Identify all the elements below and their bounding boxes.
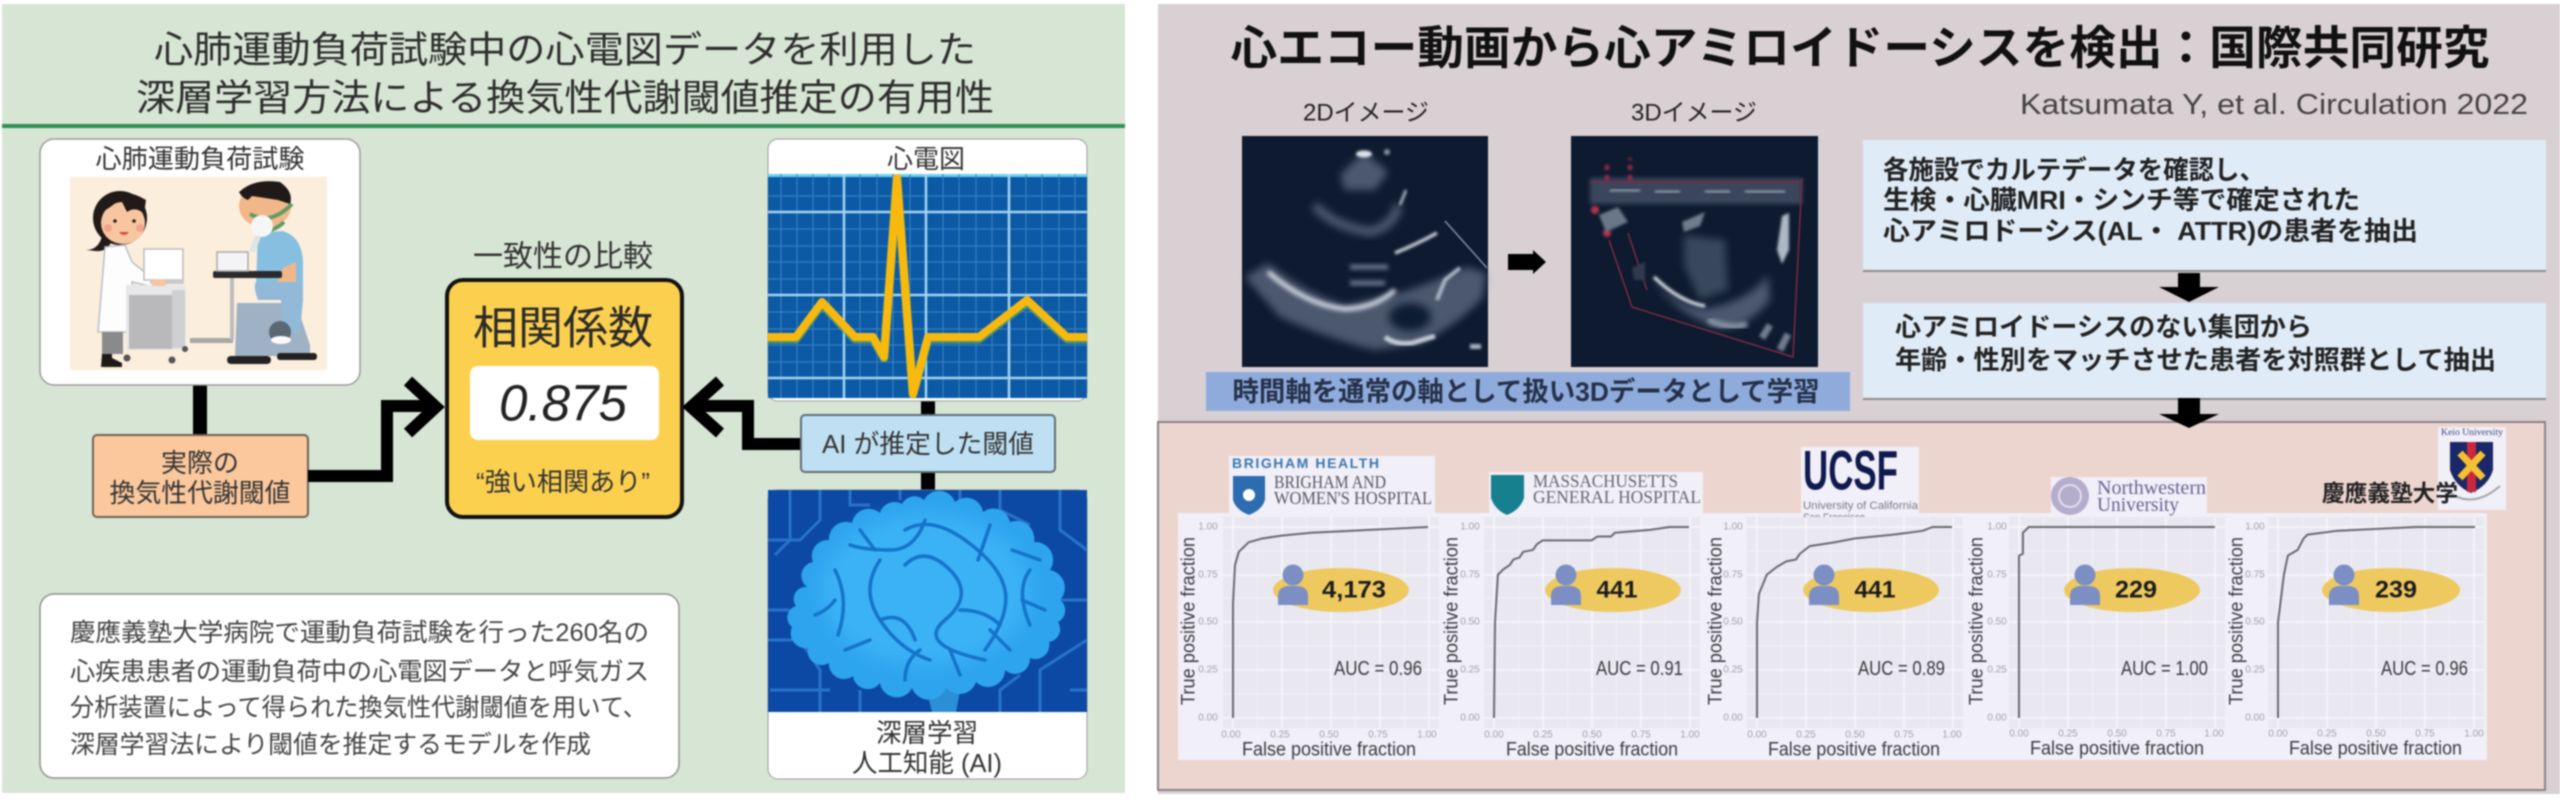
arrow: AI threshold to correlation: [691, 381, 802, 444]
box: control extraction: [1863, 303, 2546, 400]
chart: UCSF ROC AUC 0.89: 0.25: [1723, 664, 1743, 676]
chart: MGH ROC AUC 0.91: 0.75: [1631, 730, 1651, 740]
box: control extraction: 心アミロイドーシスのない集団から: [1895, 312, 2312, 342]
heading: correlation coefficient: 相関係数: [473, 302, 653, 354]
chart: Brigham ROC AUC 0.96: 0.00: [1221, 730, 1241, 740]
text block: study method: 分析装置によって得られた換気性代謝閾値を用いて、: [70, 694, 647, 722]
chart: Northwestern ROC AUC 1.00: 0.75: [2156, 728, 2176, 740]
label: comparison of agreement: 一致性の比較: [473, 240, 653, 274]
chart: UCSF ROC AUC 0.89: [1706, 517, 1963, 760]
chart: Brigham ROC AUC 0.96: 4,173: [1322, 576, 1386, 604]
box: case extraction: 心アミロドーシス(AL・ ATTR)の患者を抽出: [1883, 216, 2418, 246]
box: actual ventilatory threshold: 実際の: [161, 448, 239, 478]
panel: multicentre ROC results: [1158, 422, 2545, 790]
text block: study method: 深層学習法により閾値を推定するモデルを作成: [70, 731, 591, 759]
chart: Brigham ROC AUC 0.96: True positive fraction: [1178, 537, 1200, 705]
chart: MGH ROC AUC 0.91: 1.00: [1680, 730, 1700, 740]
image: 3D echocardiogram volume: [1571, 136, 1818, 367]
label: test name: 心肺運動負荷試験: [96, 144, 304, 174]
logo: Northwestern University: University: [2097, 494, 2179, 516]
chart: MGH ROC AUC 0.91: 0.00: [1484, 730, 1504, 740]
text block: study method: 心疾患患者の運動負荷中の心電図データと呼気ガス: [70, 658, 649, 686]
chart: UCSF ROC AUC 0.89: 0.75: [1894, 730, 1914, 740]
chart: Northwestern ROC AUC 1.00: 0.75: [1987, 570, 2007, 580]
illustration: doctor and patient on ergometer: [70, 177, 327, 370]
value: correlation: 0.875: [499, 374, 628, 432]
chart: Keio ROC AUC 0.96: 0.75: [2245, 570, 2265, 580]
logo: Brigham and Women's Hospital: WOMEN'S HOSPITAL: [1274, 488, 1432, 508]
card: deep learning AI: [768, 490, 1087, 779]
title: detection of cardiac amyloidosis: 心エコー動画から心アミロイドーシスを検出：国際共同研究: [1230, 22, 2490, 74]
chart: Brigham ROC AUC 0.96: 0.25: [1198, 664, 1218, 676]
caption: deep learning, artificial intelligence: [852, 718, 1002, 778]
chart: Northwestern ROC AUC 1.00: 1.00: [2204, 728, 2224, 740]
ultrasound cart and laptop: [124, 249, 188, 364]
box: actual ventilatory threshold: 換気性代謝閾値: [110, 478, 290, 508]
illustration: brain on circuit background: [768, 490, 1087, 712]
text block: study method: 慶應義塾大学病院で運動負荷試験を行った260名の: [70, 619, 649, 647]
chart: MGH ROC AUC 0.91: 0.00: [1460, 712, 1480, 724]
logo: UCSF: San Francisco: [1803, 512, 1865, 524]
logo: Massachusetts General Hospital: [1489, 471, 1703, 515]
chart: Brigham ROC AUC 0.96: 0.00: [1198, 712, 1218, 724]
card: correlation coefficient result: [447, 280, 682, 517]
logo: Keio University: Keio University: [2441, 427, 2504, 437]
chart: MGH ROC AUC 0.91: 0.50: [1582, 730, 1602, 740]
chart: UCSF ROC AUC 0.89: AUC = 0.89: [1858, 658, 1945, 680]
chart: Brigham ROC AUC 0.96: 0.50: [1198, 616, 1218, 628]
logo: Keio University: [2438, 427, 2506, 510]
text block: study method: [40, 594, 679, 778]
logo: UCSF: UCSF: [1803, 438, 1898, 502]
logo: Northwestern University: [2051, 477, 2207, 516]
chart: Northwestern ROC AUC 1.00: 0.00: [2009, 728, 2029, 740]
chart: Northwestern ROC AUC 1.00: False positive fraction: [2030, 738, 2204, 760]
logo: Massachusetts General Hospital: GENERAL HOSPITAL: [1533, 487, 1701, 507]
chart: UCSF ROC AUC 0.89: 0.00: [1723, 712, 1743, 724]
chart: Keio ROC AUC 0.96: 0.50: [2366, 728, 2386, 740]
chart: ECG trace on grid: [768, 174, 1087, 398]
caption: deep learning, artificial intelligence: 人工知能 (AI): [852, 748, 1002, 778]
chart: Northwestern ROC AUC 1.00: True positive fraction: [1966, 537, 1988, 705]
doctor: [86, 191, 160, 367]
chart: Brigham ROC AUC 0.96: 0.25: [1270, 730, 1290, 740]
chart: UCSF ROC AUC 0.89: 0.25: [1796, 730, 1816, 740]
chart: MGH ROC AUC 0.91: 441: [1596, 576, 1638, 604]
chart: Keio ROC AUC 0.96: 1.00: [2245, 522, 2265, 532]
chart: Northwestern ROC AUC 1.00: 0.25: [2058, 728, 2078, 740]
chart: Keio ROC AUC 0.96: True positive fraction: [2226, 537, 2248, 705]
chart: Brigham ROC AUC 0.96: 0.50: [1319, 730, 1339, 740]
chart: Keio ROC AUC 0.96: 0.25: [2317, 728, 2337, 740]
chart: UCSF ROC AUC 0.89: 1.00: [1942, 730, 1962, 740]
chart: MGH ROC AUC 0.91: [1442, 517, 1700, 760]
chart: MGH ROC AUC 0.91: 0.25: [1460, 664, 1480, 676]
chart: Northwestern ROC AUC 1.00: AUC = 1.00: [2121, 658, 2208, 680]
chart: MGH ROC AUC 0.91: True positive fraction: [1442, 537, 1462, 705]
chart: UCSF ROC AUC 0.89: 441: [1854, 576, 1896, 604]
chart: UCSF ROC AUC 0.89: False positive fraction: [1768, 740, 1940, 760]
connector: ECG to AI to brain: [921, 396, 935, 491]
chart: Keio ROC AUC 0.96: 0.50: [2245, 616, 2265, 628]
chart: Northwestern ROC AUC 1.00: [1966, 517, 2225, 760]
connector: test to actual threshold: [193, 384, 207, 436]
chart: Keio ROC AUC 0.96: 239: [2375, 576, 2417, 604]
chart: Keio ROC AUC 0.96: AUC = 0.96: [2381, 658, 2468, 680]
box: control extraction: 年齢・性別をマッチさせた患者を対照群として抽出: [1895, 345, 2496, 375]
chart: Northwestern ROC AUC 1.00: 1.00: [1987, 522, 2007, 532]
chart: Keio ROC AUC 0.96: 1.00: [2464, 728, 2484, 740]
chart: MGH ROC AUC 0.91: False positive fraction: [1506, 740, 1678, 760]
chart: Brigham ROC AUC 0.96: 1.00: [1198, 522, 1218, 532]
chart: Keio ROC AUC 0.96: 0.00: [2245, 712, 2265, 724]
chart: Keio ROC AUC 0.96: 0.00: [2268, 728, 2288, 740]
chart: MGH ROC AUC 0.91: 0.50: [1460, 616, 1480, 628]
card: ECG: [768, 139, 1087, 401]
chart: UCSF ROC AUC 0.89: True positive fraction: [1706, 537, 1726, 705]
chart: UCSF ROC AUC 0.89: 0.75: [1723, 570, 1743, 580]
arrow: second step to results: [2159, 398, 2219, 428]
logo: Brigham and Women's Hospital: [1229, 455, 1435, 515]
patient on ergometer: [190, 181, 317, 364]
chart: Brigham ROC AUC 0.96: False positive fraction: [1242, 740, 1416, 760]
logo: UCSF: University of California: [1803, 500, 1919, 512]
panel: cardiac amyloidosis international study: [1158, 4, 2560, 794]
chart: Brigham ROC AUC 0.96: 0.75: [1198, 570, 1218, 580]
box: case extraction: [1863, 140, 2546, 272]
image: 2D echocardiogram: [1242, 136, 1488, 367]
chart: Keio ROC AUC 0.96: False positive fraction: [2289, 738, 2462, 760]
chart: Brigham ROC AUC 0.96: AUC = 0.96: [1334, 658, 1422, 680]
chart: MGH ROC AUC 0.91: AUC = 0.91: [1596, 658, 1683, 680]
chart: Northwestern ROC AUC 1.00: 0.50: [1987, 616, 2007, 628]
label: 3D image: 3Dイメージ: [1631, 100, 1757, 126]
chart: Keio ROC AUC 0.96: [2226, 517, 2484, 760]
label: Keio University name: 慶應義塾大学: [2322, 480, 2458, 506]
chart: MGH ROC AUC 0.91: 0.75: [1460, 570, 1480, 580]
logo: UCSF: [1801, 438, 1919, 524]
arrow: 2D to 3D: [1508, 250, 1546, 274]
note: treated time axis as 3D data: 時間軸を通常の軸として扱い3Dデータとして学習: [1232, 376, 1820, 407]
note: strong correlation: “強い相関あり”: [476, 467, 650, 497]
chart: MGH ROC AUC 0.91: 1.00: [1460, 522, 1480, 532]
arrow: first step to second step: [2159, 273, 2219, 302]
chart: UCSF ROC AUC 0.89: 0.00: [1747, 730, 1767, 740]
box: actual ventilatory threshold: [93, 435, 308, 517]
chart: Northwestern ROC AUC 1.00: 0.00: [1987, 712, 2007, 724]
chart: Brigham ROC AUC 0.96: 0.75: [1368, 730, 1388, 740]
citation: Katsumata Y, et al. Circulation 2022: [2020, 89, 2528, 121]
title: ventilatory threshold estimation: 深層学習方法による換気性代謝閾値推定の有用性: [136, 78, 994, 118]
logo: Brigham and Women's Hospital: BRIGHAM HEALTH: [1232, 455, 1379, 471]
chart: MGH ROC AUC 0.91: 0.25: [1533, 730, 1553, 740]
logo: Northwestern University: Northwestern: [2097, 477, 2206, 499]
box: AI estimated threshold: AI が推定した閾値: [822, 429, 1034, 459]
label: ECG: 心電図: [887, 144, 965, 174]
chart: Keio ROC AUC 0.96: 0.25: [2245, 664, 2265, 676]
caption: deep learning, artificial intelligence: 深層学習: [876, 718, 978, 748]
chart: UCSF ROC AUC 0.89: 0.50: [1723, 616, 1743, 628]
chart: Keio ROC AUC 0.96: 0.75: [2415, 728, 2435, 740]
card: cardiopulmonary exercise test: [40, 139, 360, 385]
box: AI estimated threshold: [801, 415, 1055, 472]
chart: UCSF ROC AUC 0.89: 1.00: [1723, 522, 1743, 532]
arrow: actual threshold to correlation: [308, 381, 436, 476]
chart: Brigham ROC AUC 0.96: [1178, 517, 1439, 760]
chart: UCSF ROC AUC 0.89: 0.50: [1845, 730, 1865, 740]
box: case extraction: 各施設でカルテデータを確認し、: [1883, 155, 2265, 185]
chart: Northwestern ROC AUC 1.00: 0.25: [1987, 664, 2007, 676]
logo: Massachusetts General Hospital: MASSACHUSETTS: [1533, 471, 1678, 491]
logo: Brigham and Women's Hospital: BRIGHAM AND: [1274, 472, 1386, 492]
title: ventilatory threshold estimation: 心肺運動負荷試験中の心電図データを利用した: [154, 30, 976, 70]
label: 2D image: 2Dイメージ: [1303, 100, 1429, 126]
chart: Northwestern ROC AUC 1.00: 0.50: [2107, 728, 2127, 740]
panel: cardiopulmonary exercise test study: [2, 4, 1125, 793]
chart: Northwestern ROC AUC 1.00: 229: [2115, 576, 2157, 604]
title: ventilatory threshold estimation: [136, 30, 994, 118]
chart: Brigham ROC AUC 0.96: 1.00: [1417, 730, 1437, 740]
box: case extraction: 生検・心臓MRI・シンチ等で確定された: [1883, 185, 2360, 215]
